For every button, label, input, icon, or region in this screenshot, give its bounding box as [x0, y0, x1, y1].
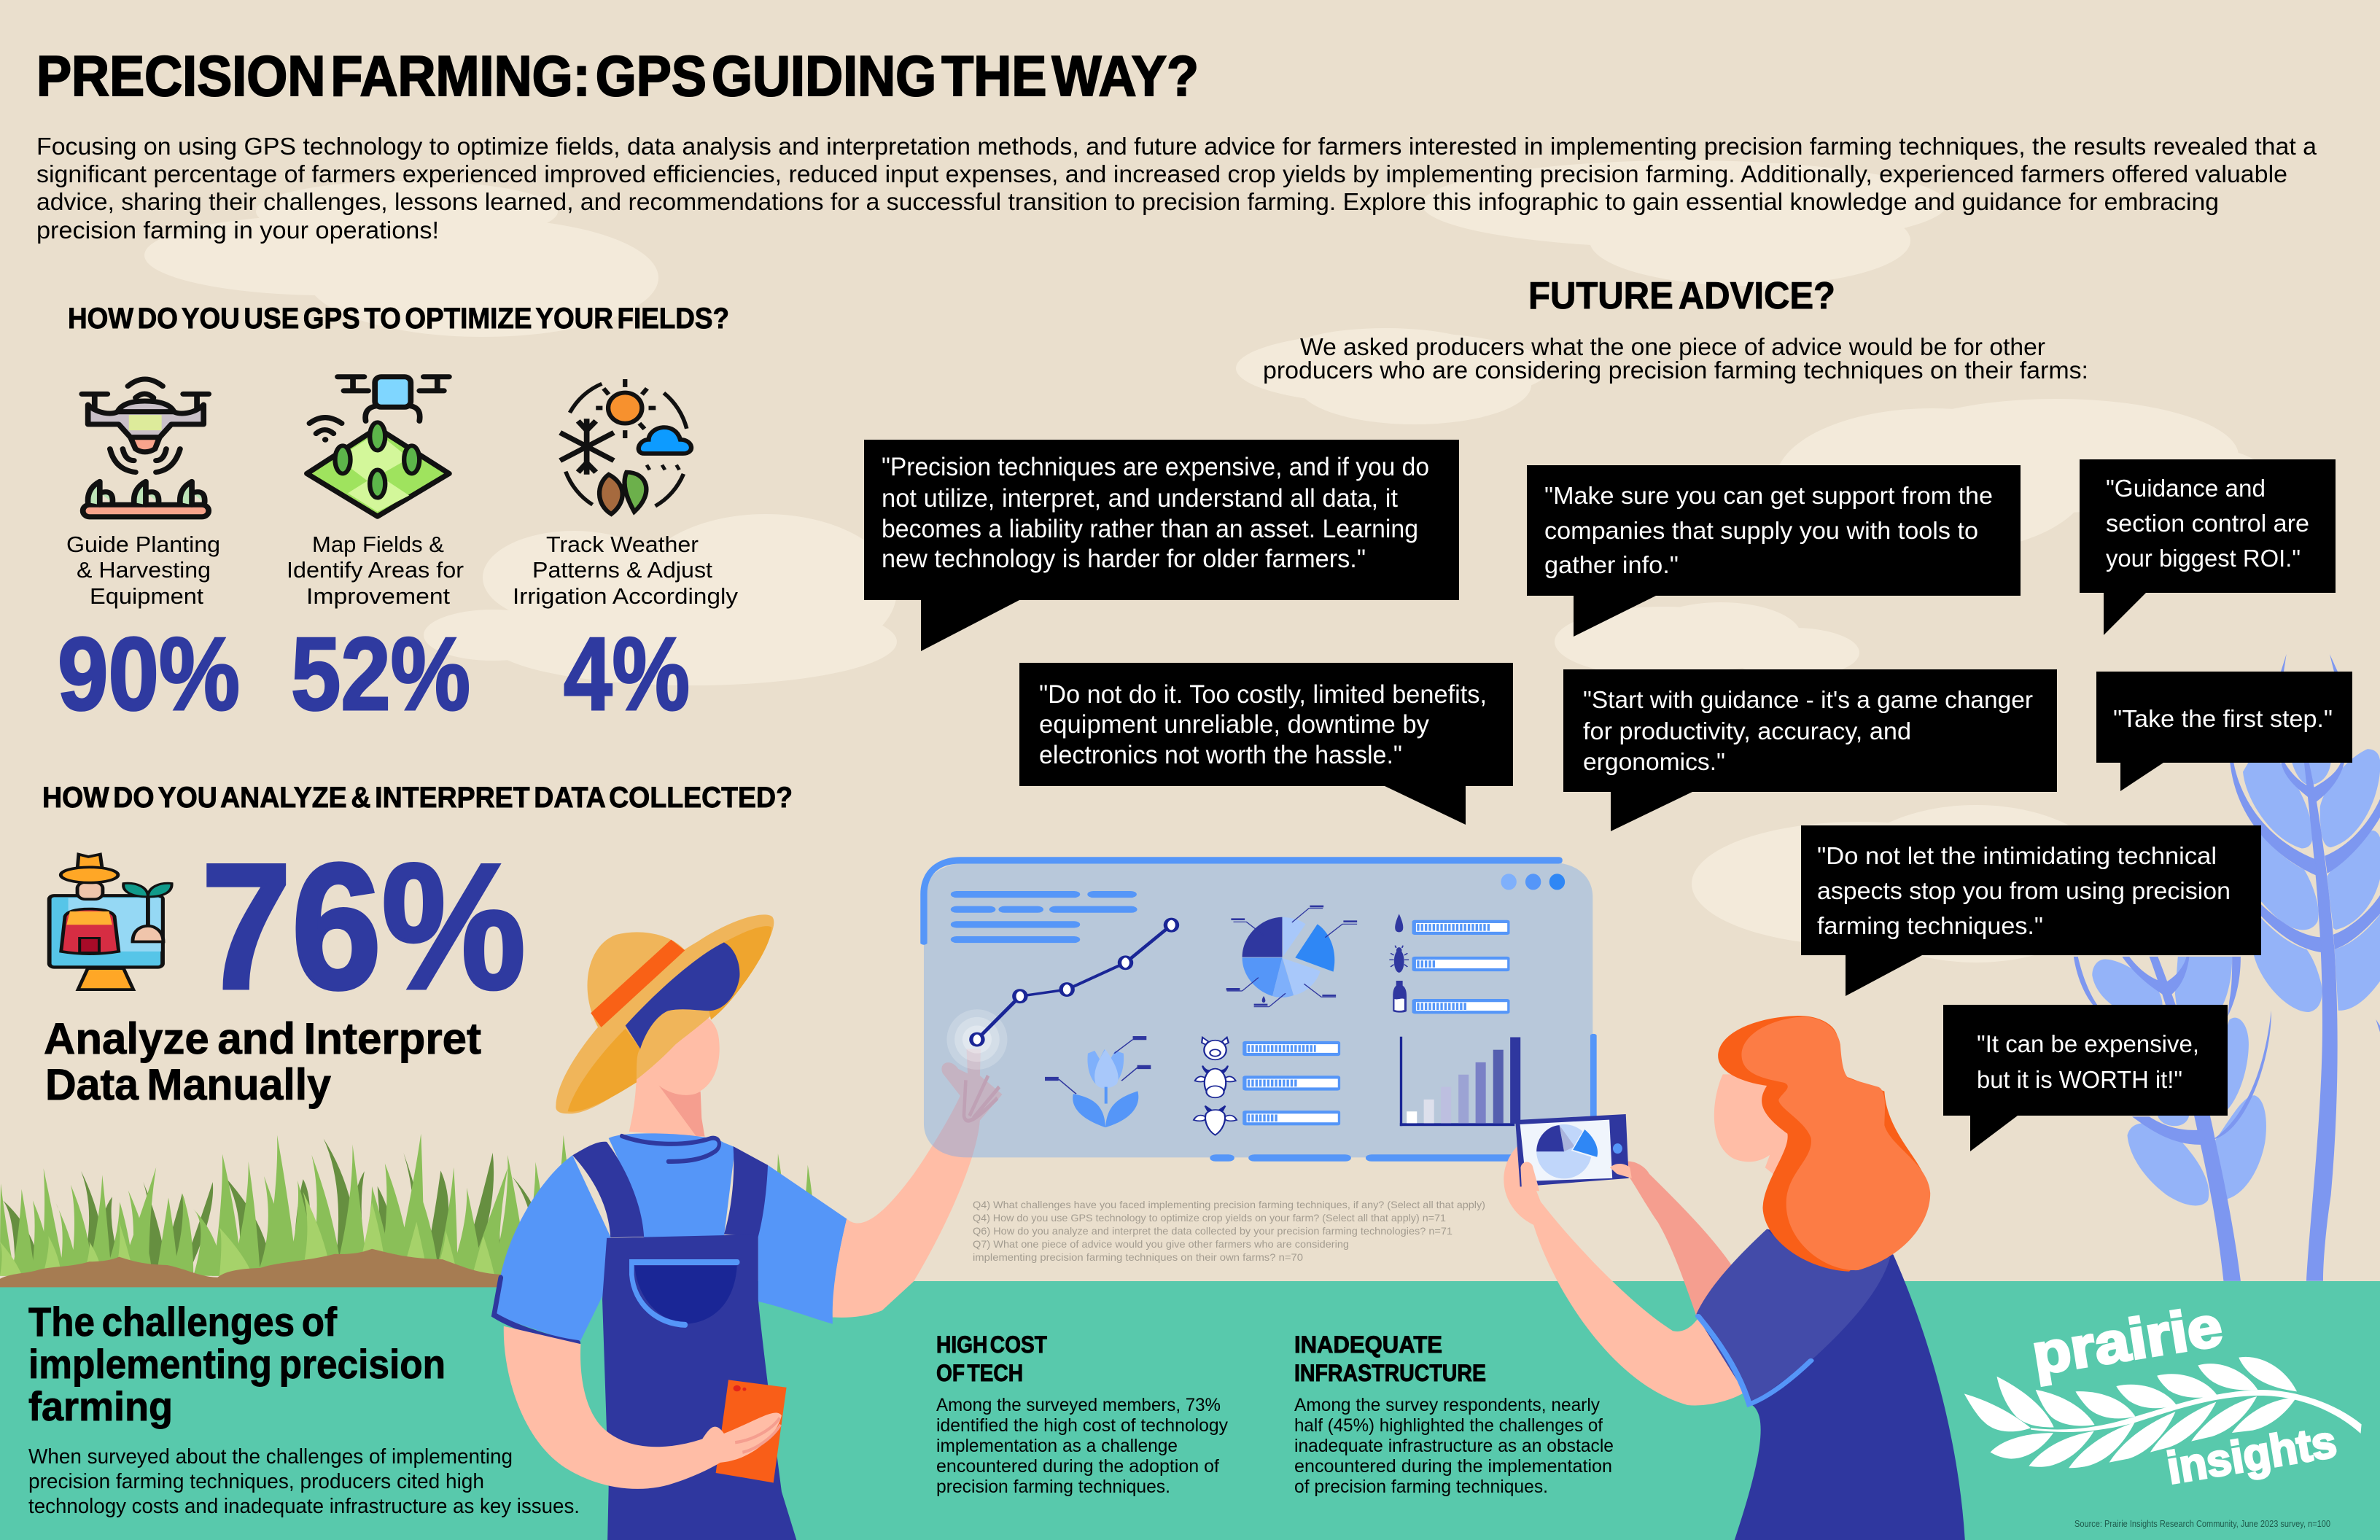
label: map fields [287, 532, 464, 609]
speech bubble: start with guidance: "Start with guidance - it's a game changer [1583, 686, 2033, 713]
speech bubble: intimidating [1801, 825, 2261, 996]
fingers [1520, 1162, 1632, 1191]
raised arm [833, 1049, 1002, 1318]
speech bubble: do not do it: "Do not do it. Too costly, limited benefits, [1039, 680, 1487, 709]
label: track weather: Irrigation Accordingly [513, 583, 739, 609]
icon: insect [1389, 946, 1409, 973]
stat: 90%: 90% [58, 616, 240, 732]
overalls and shirt [492, 1133, 847, 1540]
callout: high cost: OF TECH [936, 1360, 1023, 1386]
future advice intro: We asked producers what the one piece of advice would be for other [1300, 333, 2045, 360]
stat label: Analyze and Interpret [44, 1014, 481, 1063]
stat: 76%: 76% [201, 826, 526, 1026]
challenges summary: technology costs and inadequate infrastructure as key issues. [28, 1495, 580, 1518]
icon: weather [560, 379, 691, 514]
grass [0, 1134, 818, 1276]
dashboard panel [924, 863, 1592, 1157]
survey questions note: Q4) How do you use GPS technology to optimize crop yields on your farm? (Select all that apply) n=71 [973, 1212, 1446, 1224]
survey questions note: Q6) How do you analyze and interpret the data collected by your precision farming technologies? n=71 [973, 1225, 1452, 1237]
hat [556, 914, 774, 1113]
callout: inadequate infrastructure: Among the survey respondents, nearly [1294, 1395, 1600, 1415]
label: track weather: Patterns & Adjust [532, 557, 712, 583]
label: guide planting: & Harvesting [77, 557, 211, 583]
intro paragraph [36, 133, 2317, 244]
callout: high cost: precision farming techniques. [936, 1477, 1170, 1497]
soil [0, 1249, 521, 1287]
wheat sprig [1964, 1357, 2362, 1468]
logo: prairie insights [1964, 1294, 2362, 1494]
label: guide planting: Guide Planting [66, 532, 220, 557]
speech bubble: expensive: not utilize, interpret, and understand all data, it [882, 484, 1398, 513]
decorative clouds [144, 160, 2282, 962]
callout: high cost: encountered during the adoption of [936, 1456, 1219, 1477]
callout: inadequate infrastructure: INADEQUATE [1294, 1331, 1442, 1358]
survey questions note: implementing precision farming techniques on their own farms? n=70 [973, 1251, 1303, 1263]
label: guide planting: Equipment [90, 583, 203, 609]
label: map fields: Improvement [306, 583, 450, 609]
speech bubble: worth it: "It can be expensive, [1977, 1030, 2199, 1057]
hair [1718, 1016, 1930, 1272]
progress bars [1242, 920, 1509, 1125]
speech bubble: worth it: but it is WORTH it!" [1977, 1066, 2182, 1093]
stat: 52%: 52% [291, 616, 470, 732]
speech bubble: expensive: new technology is harder for older farmers." [882, 545, 1366, 573]
icon: pig [1202, 1038, 1229, 1059]
heading: GPS use: HOW DO YOU USE GPS TO OPTIMIZE YOUR FIELDS? [68, 303, 729, 335]
callout: inadequate infrastructure: inadequate infrastructure as an obstacle [1294, 1436, 1614, 1456]
stat label [44, 1014, 481, 1109]
icon: goat [1194, 1106, 1237, 1135]
tulip diagram [1045, 1036, 1151, 1127]
heading: challenges [28, 1299, 446, 1429]
callout: high cost: implementation as a challenge [936, 1436, 1178, 1456]
heading: data analysis: HOW DO YOU ANALYZE & INTERPRET DATA COLLECTED? [42, 782, 793, 814]
speech bubble: start with guidance [1563, 669, 2057, 831]
challenges summary: precision farming techniques, producers cited high [28, 1470, 484, 1493]
callout: inadequate infrastructure: encountered during the implementation [1294, 1456, 1612, 1477]
future advice intro [1263, 333, 2088, 384]
bar chart [1400, 1037, 1520, 1126]
speech bubble: do not do it [1019, 663, 1513, 825]
speech bubble: start with guidance: for productivity, accuracy, and [1583, 718, 1911, 744]
window dots [1501, 874, 1565, 890]
survey questions note: Q4) What challenges have you faced implementing precision farming techniques, if any? (Select all that apply) [973, 1199, 1485, 1210]
speech bubble: first step: "Take the first step." [2113, 705, 2333, 732]
icon: milk bottle [1393, 981, 1407, 1013]
phone [716, 1380, 787, 1482]
label: map fields: Map Fields & [312, 532, 444, 557]
label: guide planting [66, 532, 220, 609]
pie chart and farm icons [1194, 906, 1409, 1135]
icon: planting drone [82, 379, 209, 517]
heading: challenges: implementing precision [28, 1341, 446, 1387]
dress [1696, 1229, 1965, 1540]
speech bubble: expensive: "Precision techniques are expensive, and if you do [882, 453, 1429, 481]
farmer neck and head [617, 1008, 720, 1138]
callout: inadequate infrastructure: INFRASTRUCTURE [1294, 1360, 1486, 1386]
challenges summary: When surveyed about the challenges of implementing [28, 1445, 513, 1469]
lower arm and hand [504, 1326, 782, 1489]
speech bubble: guidance ROI: section control are [2106, 510, 2309, 537]
speech bubble: do not do it: equipment unreliable, downtime by [1039, 710, 1429, 739]
label: track weather: Track Weather [546, 532, 699, 557]
speech bubble: guidance ROI [2080, 459, 2336, 635]
sleeve [1696, 1229, 1890, 1405]
digital dashboard screen [920, 857, 1597, 1162]
dashboard frame bars [920, 857, 1597, 1162]
speech bubble: expensive: becomes a liability rather than an asset. Learning [882, 515, 1418, 543]
teal ground panel [0, 1281, 2380, 1540]
title: PRECISION FARMING: GPS GUIDING THE WAY? [36, 44, 1199, 108]
speech bubble: support: companies that supply you with tools to [1544, 517, 1978, 544]
intro paragraph: advice, sharing their challenges, lessons learned, and recommendations for a successful transition to precision farming. Explore this infographic to gain essential knowledge and guidance for embracing [36, 188, 2219, 215]
pie chart [1226, 906, 1357, 1007]
heading: future advice: FUTURE ADVICE? [1528, 275, 1835, 317]
speech bubble: support: "Make sure you can get support from the [1544, 482, 1993, 509]
speech bubble: support: gather info." [1544, 551, 1679, 578]
speech bubble: start with guidance: ergonomics." [1583, 748, 1725, 775]
speech bubble: intimidating: aspects stop you from using precision [1817, 877, 2231, 904]
icon: water drop [1395, 914, 1403, 932]
challenges summary [28, 1445, 580, 1518]
intro paragraph: precision farming in your operations! [36, 217, 439, 244]
speech bubble: intimidating: farming techniques." [1817, 912, 2043, 939]
survey questions note: Q7) What one piece of advice would you give other farmers who are considering [973, 1238, 1349, 1250]
callout: high cost: Among the surveyed members, 73% [936, 1395, 1221, 1415]
speech bubble: do not do it: electronics not worth the hassle." [1039, 741, 1402, 769]
logo: prairie insights: insights [2163, 1417, 2340, 1494]
plant: tall blue wheat stalk [2230, 654, 2380, 1281]
callout: inadequate infrastructure: half (45%) highlighted the challenges of [1294, 1415, 1603, 1436]
callout: inadequate infrastructure: of precision farming techniques. [1294, 1477, 1548, 1497]
speech bubble: guidance ROI: "Guidance and [2106, 475, 2266, 502]
stat: 4%: 4% [564, 616, 690, 732]
callout: high cost: HIGH COST [936, 1331, 1047, 1358]
speech bubble: expensive [864, 440, 1459, 651]
label: map fields: Identify Areas for [287, 557, 464, 583]
heading: challenges: The challenges of [28, 1299, 337, 1345]
cap [626, 942, 739, 1049]
speech bubble: first step [2096, 672, 2352, 791]
line chart [946, 919, 1177, 1070]
heading: challenges: farming [28, 1383, 173, 1429]
stat label: Data Manually [45, 1060, 332, 1109]
speech bubble: worth it [1943, 1005, 2228, 1151]
icon: cow [1195, 1066, 1236, 1097]
icon: farmer on monitor [50, 855, 172, 989]
callout: high cost: identified the high cost of technology [936, 1415, 1228, 1436]
illustration: woman with tablet [1504, 1016, 1965, 1540]
speech bubble: guidance ROI: your biggest ROI." [2106, 545, 2301, 572]
face [1714, 1074, 1811, 1176]
intro paragraph: significant percentage of farmers experienced improved efficiencies, reduced input expenses, and increased crop yields by implementing precision farming. Additionally, experienced farmers offered valuable [36, 160, 2287, 187]
tablet [1515, 1114, 1629, 1186]
survey questions note [973, 1199, 1485, 1263]
label: track weather [513, 532, 739, 609]
plant: short blue wheat stalk [2074, 957, 2271, 1281]
callout: inadequate infrastructure [1294, 1331, 1614, 1497]
intro paragraph: Focusing on using GPS technology to optimize fields, data analysis and interpretation methods, and future advice for farmers interested in implementing precision farming techniques, the results revealed that a [36, 133, 2317, 160]
back arm [1610, 1162, 1732, 1316]
callout: high cost [936, 1331, 1228, 1497]
speech bubble: intimidating: "Do not let the intimidating technical [1817, 842, 2217, 869]
illustration: farmer [492, 914, 1002, 1540]
source note: Source: Prairie Insights Research Community, June 2023 survey, n=100 [2074, 1518, 2330, 1529]
icon: field mapping drone [307, 377, 449, 516]
logo: prairie insights: prairie [2028, 1294, 2226, 1387]
future advice intro: producers who are considering precision farming techniques on their farms: [1263, 357, 2088, 384]
front arm [1504, 1146, 1745, 1405]
speech bubble: support [1527, 465, 2021, 637]
